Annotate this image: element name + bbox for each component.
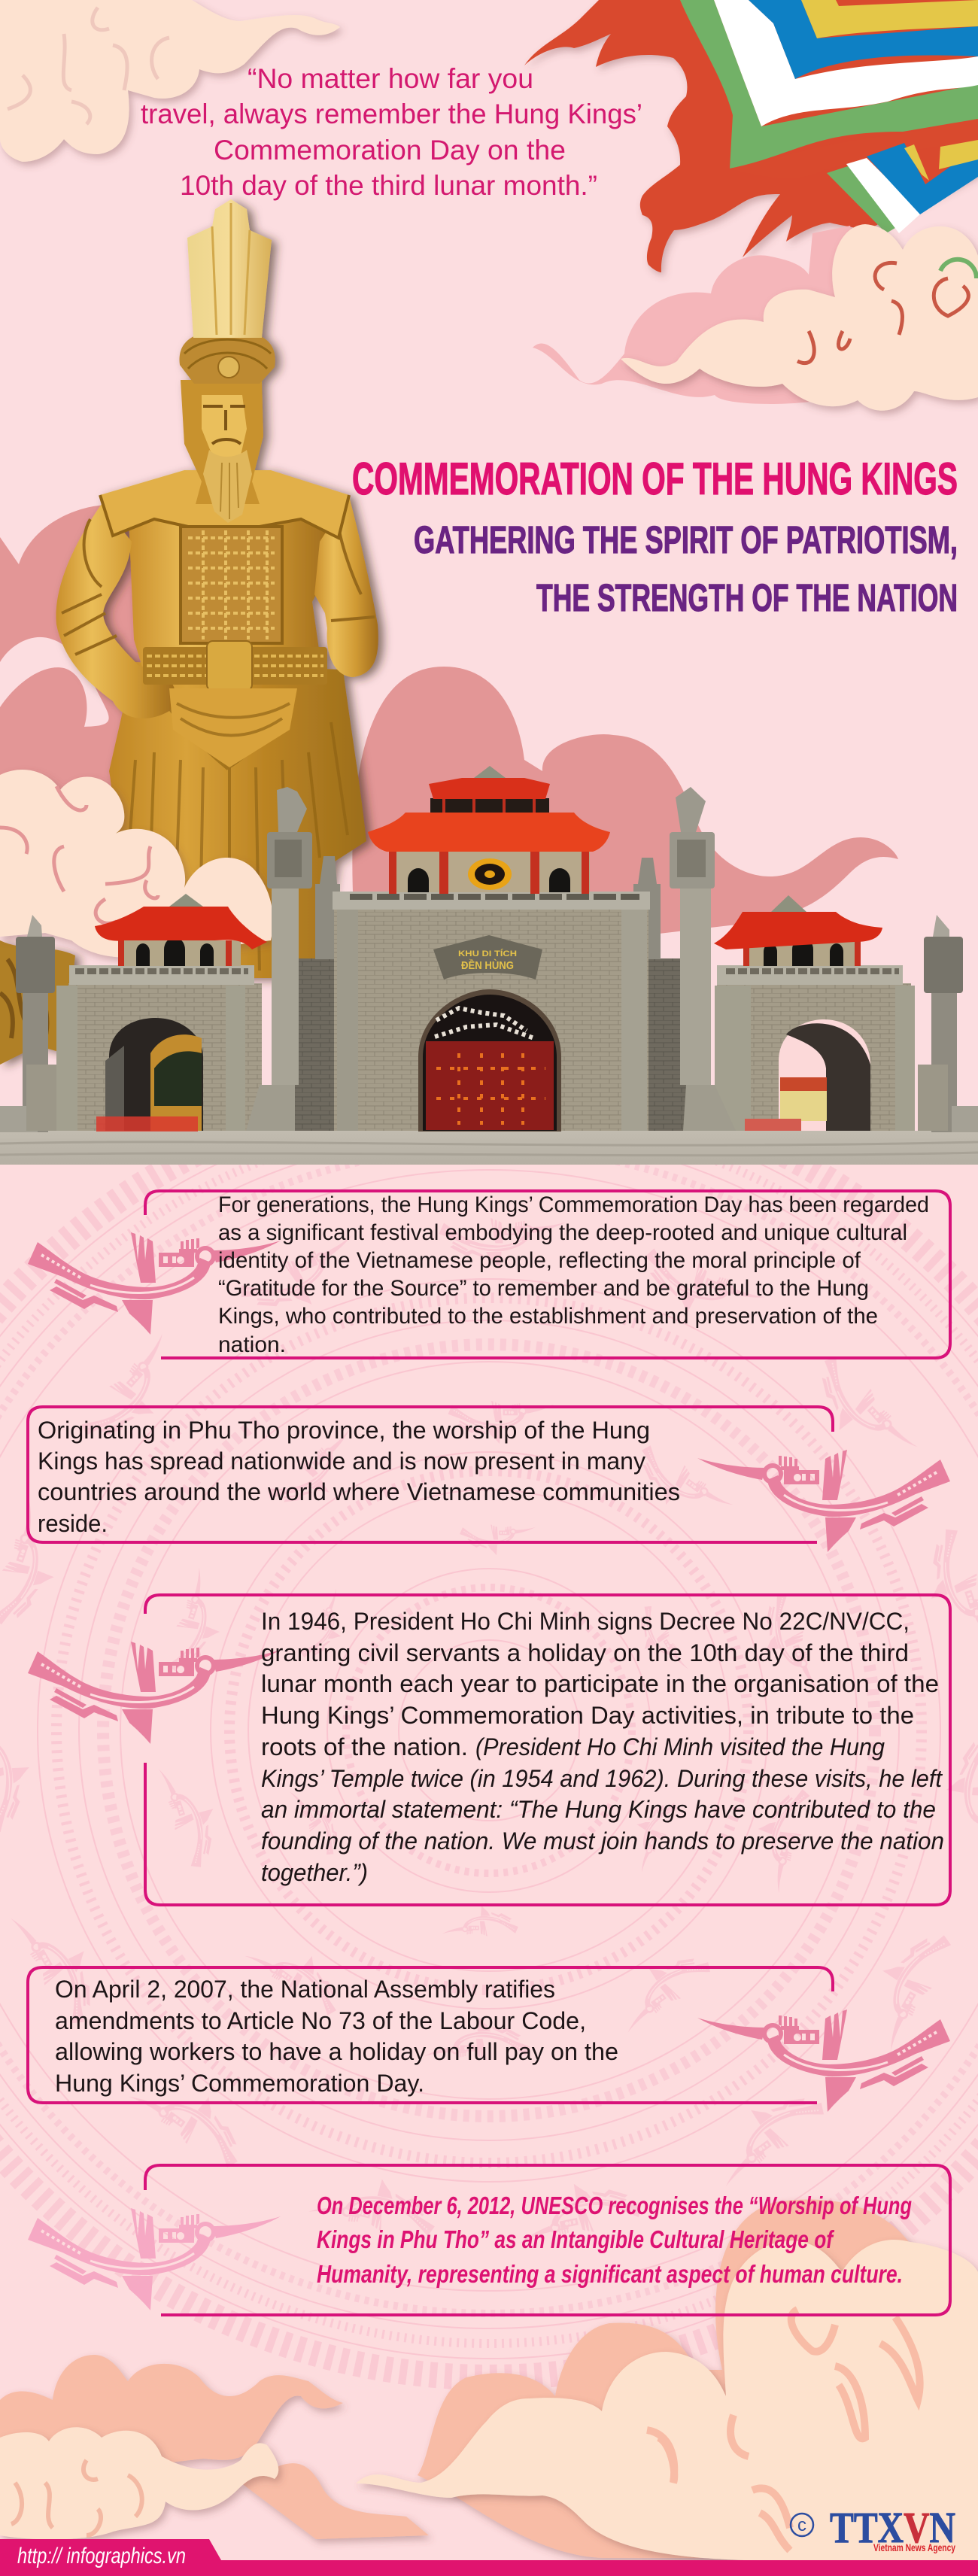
- panel 3 text: granting civil servants a holiday on the 10th day of the third: [261, 1639, 909, 1666]
- pink cloud behind right cream cloud: [533, 226, 873, 404]
- panel 1 text: [218, 1192, 929, 1357]
- background pink cloud: centre and right: [352, 667, 898, 940]
- statue shoulders: [100, 470, 349, 538]
- statue: [0, 199, 378, 1065]
- footer url: http:// infographics.vn: [17, 2544, 186, 2568]
- statue chest panel: [181, 527, 282, 643]
- panel 1 text: nation.: [218, 1332, 286, 1357]
- statue face and neck: [181, 380, 263, 504]
- flag: stripes: [680, 0, 978, 233]
- subtitle: [414, 518, 958, 619]
- title: [352, 454, 958, 619]
- panel 1 text: Kings, who contributed to the establishment and preservation of the: [218, 1304, 878, 1329]
- panel 3 text: roots of the nation.: [261, 1733, 468, 1760]
- drum animal motifs: [0, 1218, 978, 2247]
- panel 4: 2007 labour code: [28, 1967, 950, 2112]
- bottom cream cloud: left: [0, 2427, 278, 2539]
- quote: Commemoration Day on the: [214, 135, 566, 166]
- panel 3 text: together.”): [261, 1859, 368, 1886]
- central block: [333, 892, 650, 1131]
- upper pavilion: [368, 766, 610, 894]
- flag: red fringe: [524, 0, 978, 272]
- panel 3 text: an immortal statement: “The Hung Kings have contributed to the: [261, 1796, 936, 1823]
- TTXVN logo: c: [797, 2515, 806, 2535]
- quote: “No matter how far you: [248, 63, 533, 94]
- panel 4 text: allowing workers to have a holiday on full pay on the: [55, 2038, 618, 2065]
- statue base rock: [0, 940, 75, 1065]
- statue torso: [128, 500, 331, 670]
- left low wall: [26, 1065, 71, 1131]
- footer bar: [0, 2539, 978, 2576]
- statue turban: [180, 329, 275, 384]
- cream cloud left of temple: [0, 770, 273, 958]
- statue apron: [169, 688, 297, 767]
- quote: [141, 63, 642, 201]
- left outer pillar: [0, 915, 55, 1132]
- bird icon 1: [28, 1232, 281, 1335]
- bird icon 3: [28, 1642, 281, 1744]
- right outer pillar: [918, 915, 978, 1132]
- panel 3 text: In 1946, President Ho Chi Minh signs Decree No 22C/NV/CC,: [261, 1608, 910, 1635]
- panel 3: 1946 decree: [28, 1595, 950, 1905]
- cream cloud top left: [0, 0, 340, 162]
- temple ground: [0, 1131, 978, 1165]
- small pillars: [315, 856, 661, 959]
- panel 2 text: Kings has spread nationwide and is now present in many: [38, 1447, 645, 1475]
- bottom peach clouds: [0, 2199, 978, 2558]
- tall right pillar: [670, 787, 736, 1131]
- tall left pillar: [246, 787, 312, 1131]
- panel 1 text: “Gratitude for the Source” to remember and be grateful to the Hung: [218, 1276, 869, 1301]
- panel 1 text: For generations, the Hung Kings’ Commemoration Day has been regarded: [218, 1192, 929, 1217]
- drum pattern background: [0, 1083, 978, 2576]
- TTXVN logo: TTXVN: [830, 2503, 955, 2552]
- statue right arm: [314, 497, 378, 677]
- panel 2: origin: [28, 1407, 950, 1552]
- right wing: [714, 895, 915, 1131]
- panel 2 text: Originating in Phu Tho province, the worship of the Hung: [38, 1417, 650, 1444]
- panel 5: UNESCO: [28, 2165, 950, 2315]
- panel 2 text: [38, 1417, 680, 1537]
- bird icon 5: [28, 2208, 281, 2310]
- panel 4 text: [55, 1976, 618, 2097]
- statue beard: [203, 450, 252, 523]
- panel 4 text: amendments to Article No 73 of the Labour Code,: [55, 2007, 586, 2034]
- top background: [0, 0, 978, 1166]
- panel 3 text: Kings’ Temple twice (in 1954 and 1962). During these visits, he left: [261, 1765, 943, 1792]
- statue skirt pleats: [129, 700, 348, 971]
- panel 4 text: Hung Kings’ Commemoration Day.: [55, 2070, 424, 2097]
- background pink cloud: left: [0, 497, 196, 925]
- panel 3 text: Hung Kings’ Commemoration Day activities, in tribute to the: [261, 1702, 914, 1729]
- panel 3 text: [261, 1608, 944, 1886]
- panel 1 text: as a significant festival embodying the deep-rooted and unique cultural: [218, 1220, 907, 1245]
- statue belt: [143, 647, 327, 685]
- cream cloud top right: [621, 224, 978, 411]
- statue arm guards: [62, 519, 375, 655]
- panel 5 text: [317, 2192, 912, 2288]
- left wing: [56, 894, 267, 1132]
- main arch and door: [418, 989, 561, 1132]
- statue left arm: [56, 504, 175, 718]
- panel 3 text: founding of the nation. We must join hands to preserve the nation: [261, 1827, 944, 1855]
- plaque: [433, 935, 542, 980]
- bird icon 2: [697, 1450, 950, 1552]
- panel 3 text: (President Ho Chi Minh visited the Hung: [475, 1733, 885, 1760]
- plaque: KHU DI TÍCH: [458, 949, 517, 958]
- dark side walls: [293, 958, 686, 1131]
- panel 1 text: identity of the Vietnamese people, reflecting the moral principle of: [218, 1248, 861, 1273]
- panel 5 text: Kings in Phu Tho” as an Intangible Cultural Heritage of: [317, 2225, 834, 2253]
- panel 2 text: countries around the world where Vietnamese communities: [38, 1478, 680, 1505]
- plaque: ĐỀN HÙNG: [461, 958, 514, 972]
- temple: [0, 766, 978, 1165]
- statue skirt: [109, 662, 366, 978]
- quote: travel, always remember the Hung Kings’: [141, 99, 642, 129]
- quote: 10th day of the third lunar month.”: [180, 170, 597, 201]
- bottom cream cloud: large right: [356, 2240, 978, 2560]
- panel 1: generations: [28, 1191, 950, 1358]
- panel 2 text: reside.: [38, 1510, 108, 1537]
- panel 3 text: lunar month each year to participate in the organisation of the: [261, 1670, 939, 1697]
- panel 4 text: On April 2, 2007, the National Assembly ratifies: [55, 1976, 555, 2003]
- statue crown plume: [187, 199, 272, 338]
- bird icon 4: [697, 2009, 950, 2112]
